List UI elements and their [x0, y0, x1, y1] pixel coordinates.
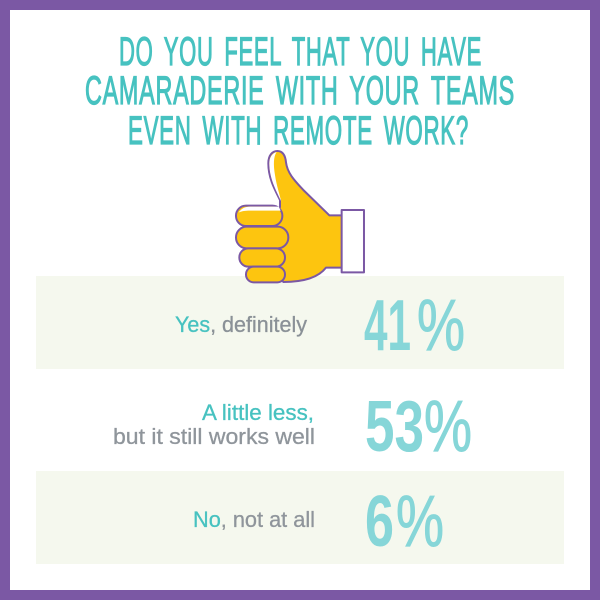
title [85, 30, 515, 153]
cuff [342, 210, 364, 272]
label: still works well: but it still works well [113, 424, 315, 449]
value: 41%: % [417, 286, 465, 366]
label: a little less: A little less, [202, 400, 314, 425]
row: yes [175, 286, 465, 366]
value: 6% [365, 482, 444, 562]
finger 2 [236, 227, 288, 248]
value: 53%: 53 [365, 387, 424, 467]
hand body [260, 151, 342, 282]
finger 1 highlight [239, 207, 281, 213]
label: no: No, not at all [193, 507, 315, 532]
value: 41%: 41 [364, 286, 411, 366]
finger 1 [236, 206, 282, 226]
value: 6%: % [396, 482, 444, 562]
value: 53%: % [424, 387, 472, 467]
icon: thumbs up [236, 151, 364, 282]
thumb highlight [269, 152, 281, 202]
finger 4 [246, 267, 285, 282]
label: yes: Yes, definitely [175, 312, 307, 337]
row backgrounds [36, 276, 564, 564]
row: a little less [113, 387, 472, 467]
value: 6%: 6 [365, 482, 394, 562]
finger 3 [239, 248, 285, 267]
row: no [193, 482, 444, 562]
